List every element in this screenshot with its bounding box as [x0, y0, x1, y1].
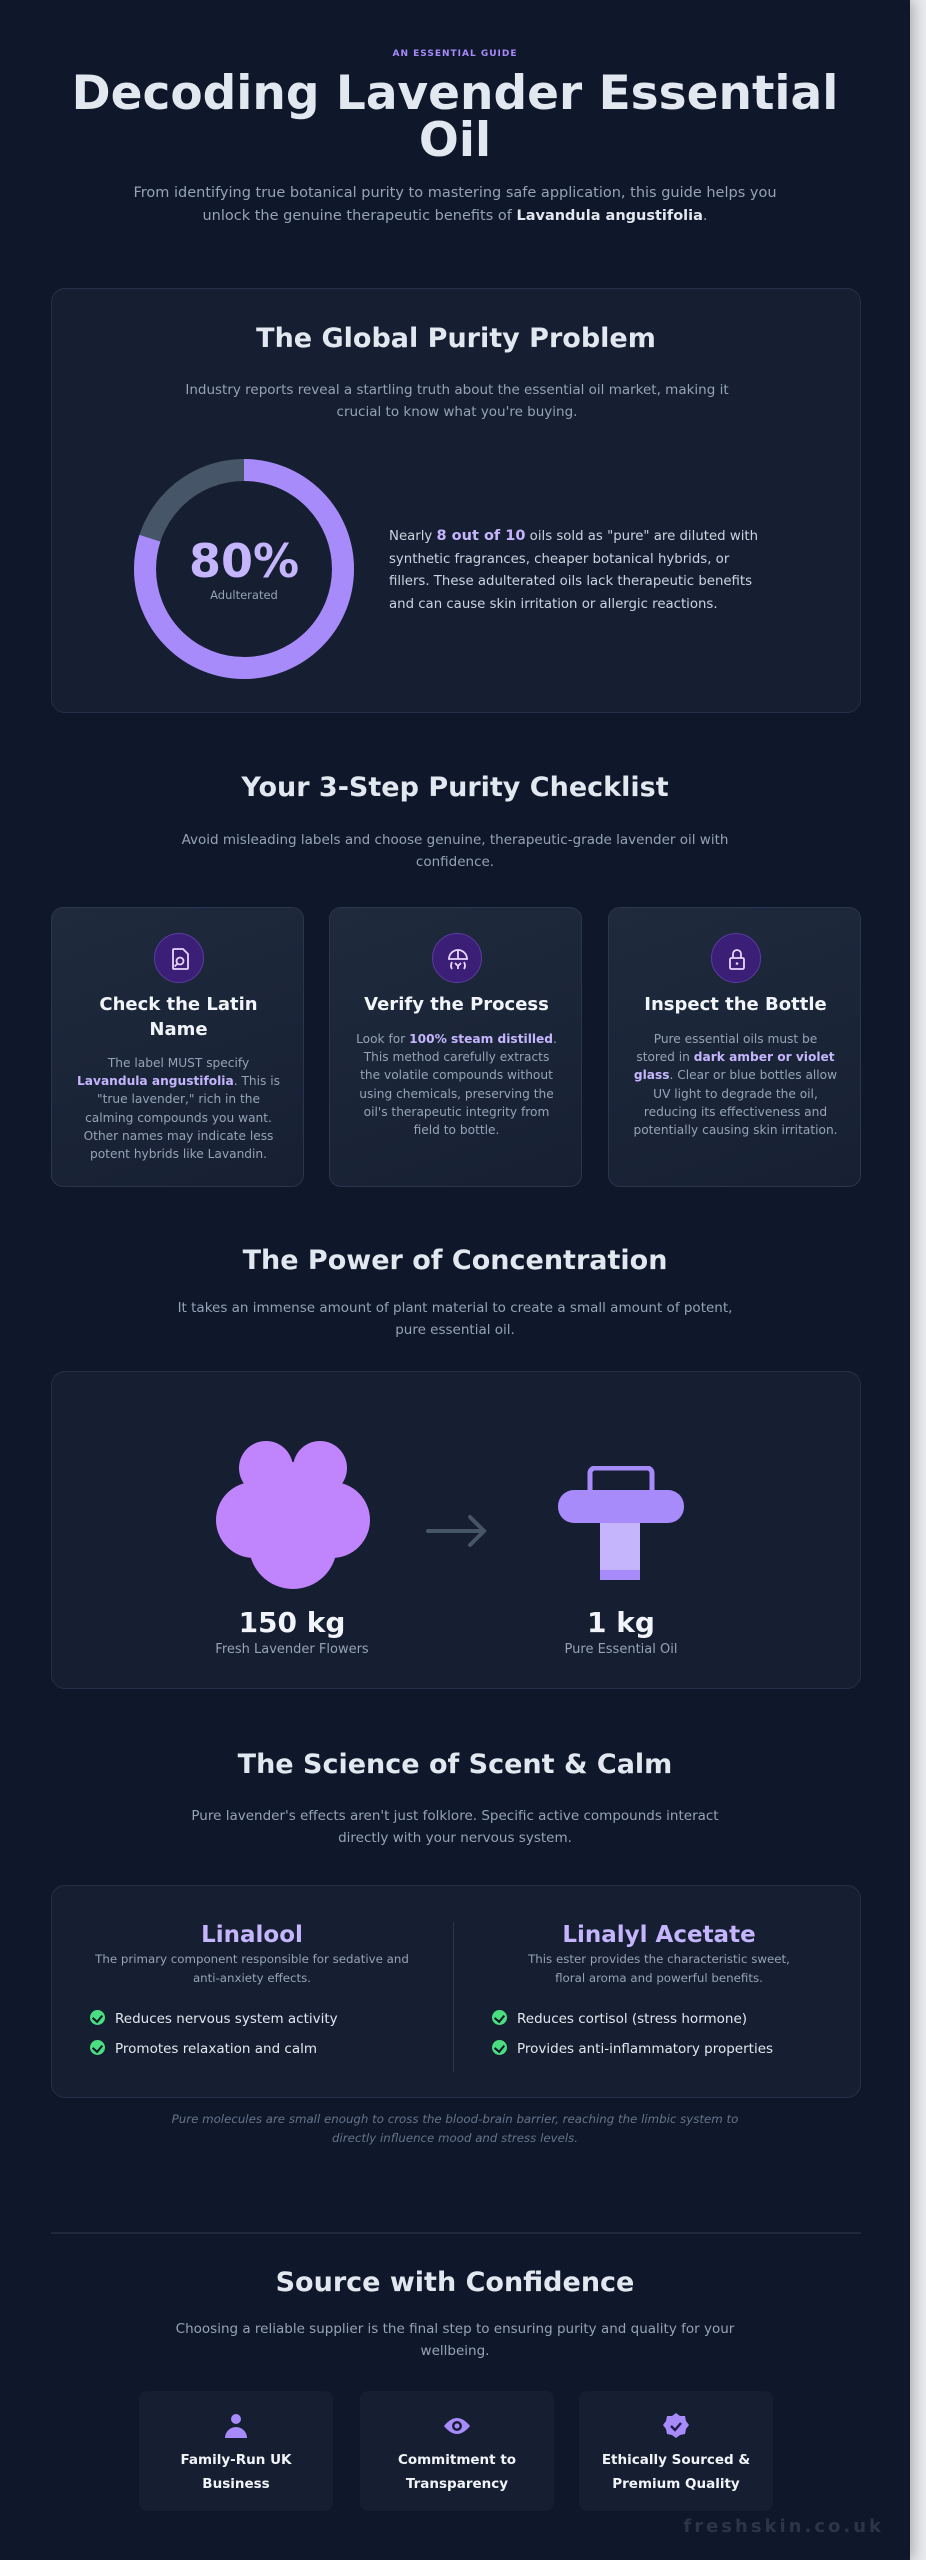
icon: distill [432, 933, 482, 983]
card: transparency: Commitment to Transparency [398, 2452, 516, 2492]
card: latin name [51, 907, 304, 1187]
compound: linalool [90, 1922, 409, 2057]
card: ethical: Ethically Sourced & Premium Quality [602, 2452, 750, 2492]
italic note: Pure molecules are small enough to cross the blood-brain barrier, reaching the limbic system to directly influence mood and stress levels. [172, 2112, 738, 2145]
compound: linalyl acetate: This ester provides the characteristic sweet, floral aroma and powerful benefits. [528, 1952, 790, 1985]
card: family run: Family-Run UK Business [180, 2452, 292, 2492]
title: Decoding Lavender Essential Oil [72, 66, 838, 168]
card: family run [139, 2391, 333, 2511]
card: ethical [579, 2391, 773, 2511]
icon: lock [711, 933, 761, 983]
card: process [329, 907, 582, 1187]
card body: Look for 100% steam distilled. This method carefully extracts the volatile compounds without using chemicals, preserving the oil's therapeutic integrity from field to bottle. [356, 1032, 557, 1137]
footer brand: freshskin.co.uk [683, 2516, 884, 2537]
icon: person [225, 2414, 247, 2438]
heading: source: Source with Confidence [276, 2267, 634, 2298]
stat text: Nearly 8 out of 10 oils sold as "pure" are diluted with synthetic fragrances, cheaper botanical hybrids, or fillers. These adulterated oils lack therapeutic benefits and can cause skin irritation or allergic reactions. [389, 528, 758, 612]
icon: oil bottle [558, 1466, 684, 1580]
stat: flowers: 150 kg [239, 1606, 345, 1639]
donut chart: 80% [189, 534, 299, 588]
stat: oil: 1 kg [587, 1606, 655, 1639]
concentration description: It takes an immense amount of plant material to create a small amount of potent, pure essential oil. [178, 1300, 732, 1338]
heading: The Global Purity Problem [256, 323, 656, 354]
panel: concentration [51, 1371, 861, 1689]
science description: Pure lavender's effects aren't just folklore. Specific active compounds interact directly with your nervous system. [191, 1808, 719, 1846]
description: Industry reports reveal a startling truth about the essential oil market, making it crucial to know what you're buying. [185, 382, 729, 420]
compound: linalyl acetate: Reduces cortisol (stress hormone) [517, 2011, 747, 2027]
arrow [426, 1514, 487, 1547]
source description: Choosing a reliable supplier is the final step to ensuring purity and quality for your wellbeing. [176, 2321, 734, 2359]
stat: flowers [215, 1606, 369, 1657]
heading: checklist: Your 3-Step Purity Checklist [241, 772, 669, 803]
subtitle: From identifying true botanical purity to mastering safe application, this guide helps you unlock the genuine therapeutic benefits of Lavandula angustifolia. [133, 185, 777, 224]
heading: science: The Science of Scent & Calm [238, 1749, 672, 1780]
stat: oil: Pure Essential Oil [565, 1642, 677, 1657]
card body: The label MUST specify Lavandula angustifolia. This is "true lavender," rich in the calming compounds you want. Other names may indicate less potent hybrids like Lavandin. [77, 1056, 280, 1161]
divider [453, 1922, 454, 2072]
compound: linalool: The primary component responsible for sedative and anti-anxiety effects. [95, 1952, 409, 1985]
icon: badge check [663, 2413, 689, 2438]
stat: oil [565, 1606, 677, 1657]
card title: Verify the Process [364, 994, 549, 1015]
panel: compounds [51, 1885, 861, 2098]
compound: linalool: Reduces nervous system activity [115, 2011, 338, 2027]
checklist description: Avoid misleading labels and choose genuine, therapeutic-grade lavender oil with confidence. [182, 832, 728, 870]
card title: Check the Latin Name [99, 994, 258, 1040]
card: bottle [608, 907, 861, 1187]
compound: linalyl acetate [492, 1922, 790, 2057]
kicker: AN ESSENTIAL GUIDE [392, 49, 518, 59]
icon: eye [444, 2418, 470, 2434]
donut chart: Adulterated [210, 588, 278, 602]
card: transparency [360, 2391, 554, 2511]
heading: concentration: The Power of Concentration [243, 1245, 667, 1276]
card title: Inspect the Bottle [644, 994, 827, 1015]
compound: linalyl acetate: Provides anti-inflammatory properties [517, 2041, 773, 2057]
compound: linalyl acetate: Linalyl Acetate [562, 1922, 756, 1948]
card body: Pure essential oils must be stored in dark amber or violet glass. Clear or blue bottles allow UV light to degrade the oil, reducing its effectiveness and potentially causing skin irritation. [633, 1032, 838, 1137]
panel: global purity problem [51, 288, 861, 713]
compound: linalool: Linalool [201, 1922, 303, 1948]
stat: flowers: Fresh Lavender Flowers [215, 1642, 369, 1657]
icon: document search [154, 933, 204, 983]
icon: flower [216, 1441, 370, 1589]
donut chart [134, 459, 354, 679]
compound: linalool: Promotes relaxation and calm [115, 2041, 317, 2057]
